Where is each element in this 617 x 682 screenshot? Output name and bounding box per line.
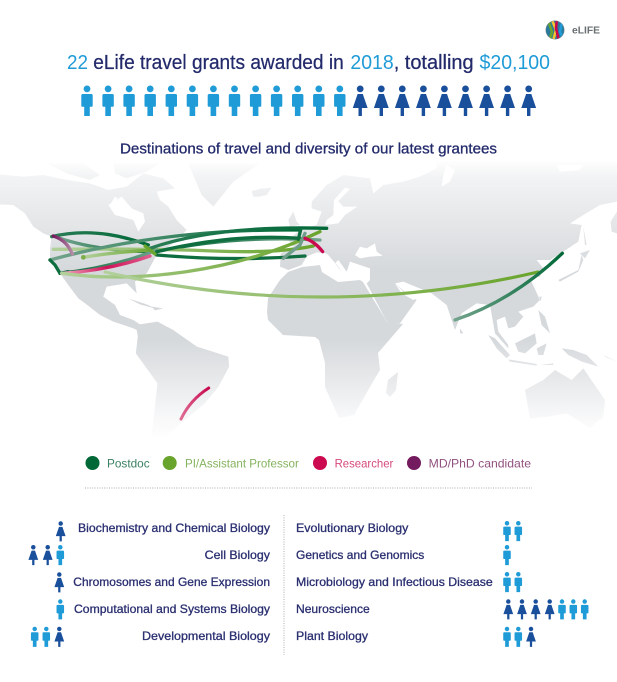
Africa: [267, 265, 403, 418]
world map: [0, 160, 617, 440]
legend: PI/Assistant Professor: [185, 456, 299, 470]
logo: [546, 20, 600, 40]
subject list: right column: Evolutionary Biology: [296, 521, 408, 535]
title: $20,100: [480, 52, 550, 74]
subject list: left column: Chromosomes and Gene Expression: [73, 575, 270, 589]
subject list: left column: Developmental Biology: [142, 629, 270, 643]
title: 22: [67, 52, 88, 74]
legend: Researcher: [335, 456, 393, 470]
title: 2018: [350, 52, 394, 74]
legend: MD/PhD candidate: [429, 456, 531, 470]
pictogram: 22 grantees: [81, 86, 536, 116]
subject list: left column: Cell Biology: [205, 548, 270, 562]
subject list: right column: [296, 521, 588, 647]
subject list: right column: Genetics and Genomics: [296, 548, 424, 562]
legend: [86, 456, 531, 470]
South America: [136, 322, 229, 437]
subject list: right column: Neuroscience: [296, 602, 370, 616]
subject list: left column: [28, 521, 270, 647]
title: [67, 52, 550, 74]
subject list: left column: Computational and Systems Biology: [74, 602, 270, 616]
legend: Postdoc: [107, 456, 150, 470]
title: , totalling: [394, 52, 474, 74]
subject list: right column: Plant Biology: [296, 629, 368, 643]
travel routes: [50, 228, 562, 419]
logo: eLIFE: [572, 26, 600, 36]
subtitle: Destinations of travel and diversity of our latest grantees: [120, 142, 497, 158]
subject list: left column: Biochemistry and Chemical Biology: [78, 521, 270, 535]
subject list: right column: Microbiology and Infectious Disease: [296, 575, 493, 589]
title: eLife travel grants awarded in: [93, 52, 344, 74]
